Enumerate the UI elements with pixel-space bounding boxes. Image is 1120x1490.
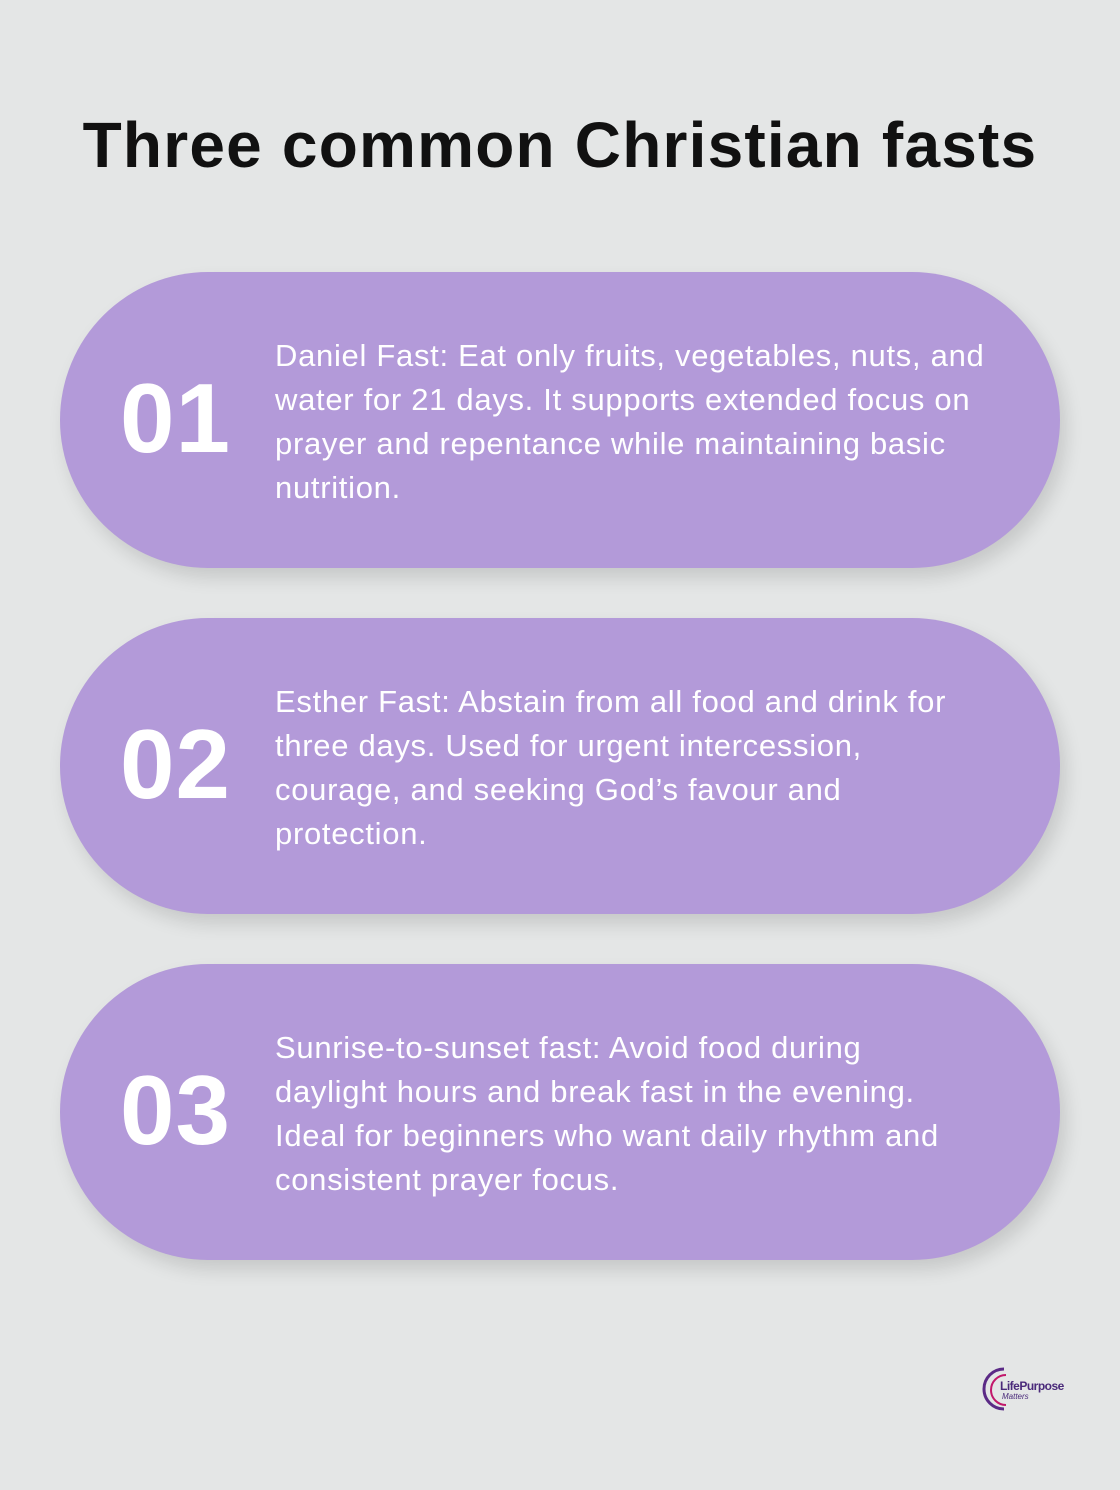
panel: card 02 [60, 618, 1060, 914]
title: Three common Christian fasts [83, 109, 1037, 181]
text: Esther Fast: courage, and seeking God’s favour and [275, 772, 841, 807]
text: Sunrise-to-sunset: consistent prayer focus. [275, 1162, 619, 1197]
logo [982, 1368, 1064, 1410]
logo: Matters [1002, 1392, 1029, 1401]
text: Daniel Fast: water for 21 days. It supports extended focus on [275, 382, 970, 417]
text: Daniel Fast: Daniel Fast: Eat only fruits, vegetables, nuts, and [275, 338, 984, 373]
text: Sunrise-to-sunset [275, 1030, 939, 1197]
text: Daniel Fast [275, 338, 984, 505]
number 03: 03 [120, 1055, 231, 1165]
text: Sunrise-to-sunset: Sunrise-to-sunset fast: Avoid food during [275, 1030, 861, 1065]
text: Daniel Fast: prayer and repentance while maintaining basic [275, 426, 946, 461]
text: Daniel Fast: nutrition. [275, 470, 401, 505]
text: Esther Fast [275, 684, 946, 851]
text: Esther Fast: Esther Fast: Abstain from all food and drink for [275, 684, 946, 719]
text: Esther Fast: three days. Used for urgent intercession, [275, 728, 862, 763]
number 01: 01 [120, 363, 231, 473]
text: Sunrise-to-sunset: Ideal for beginners who want daily rhythm and [275, 1118, 939, 1153]
text: Esther Fast: protection. [275, 816, 427, 851]
panel: card 03 [60, 964, 1060, 1260]
panel: card 01 [60, 272, 1060, 568]
text: Sunrise-to-sunset: daylight hours and break fast in the evening. [275, 1074, 915, 1109]
logo: LifePurpose [1000, 1379, 1064, 1393]
number 02: 02 [120, 709, 231, 819]
